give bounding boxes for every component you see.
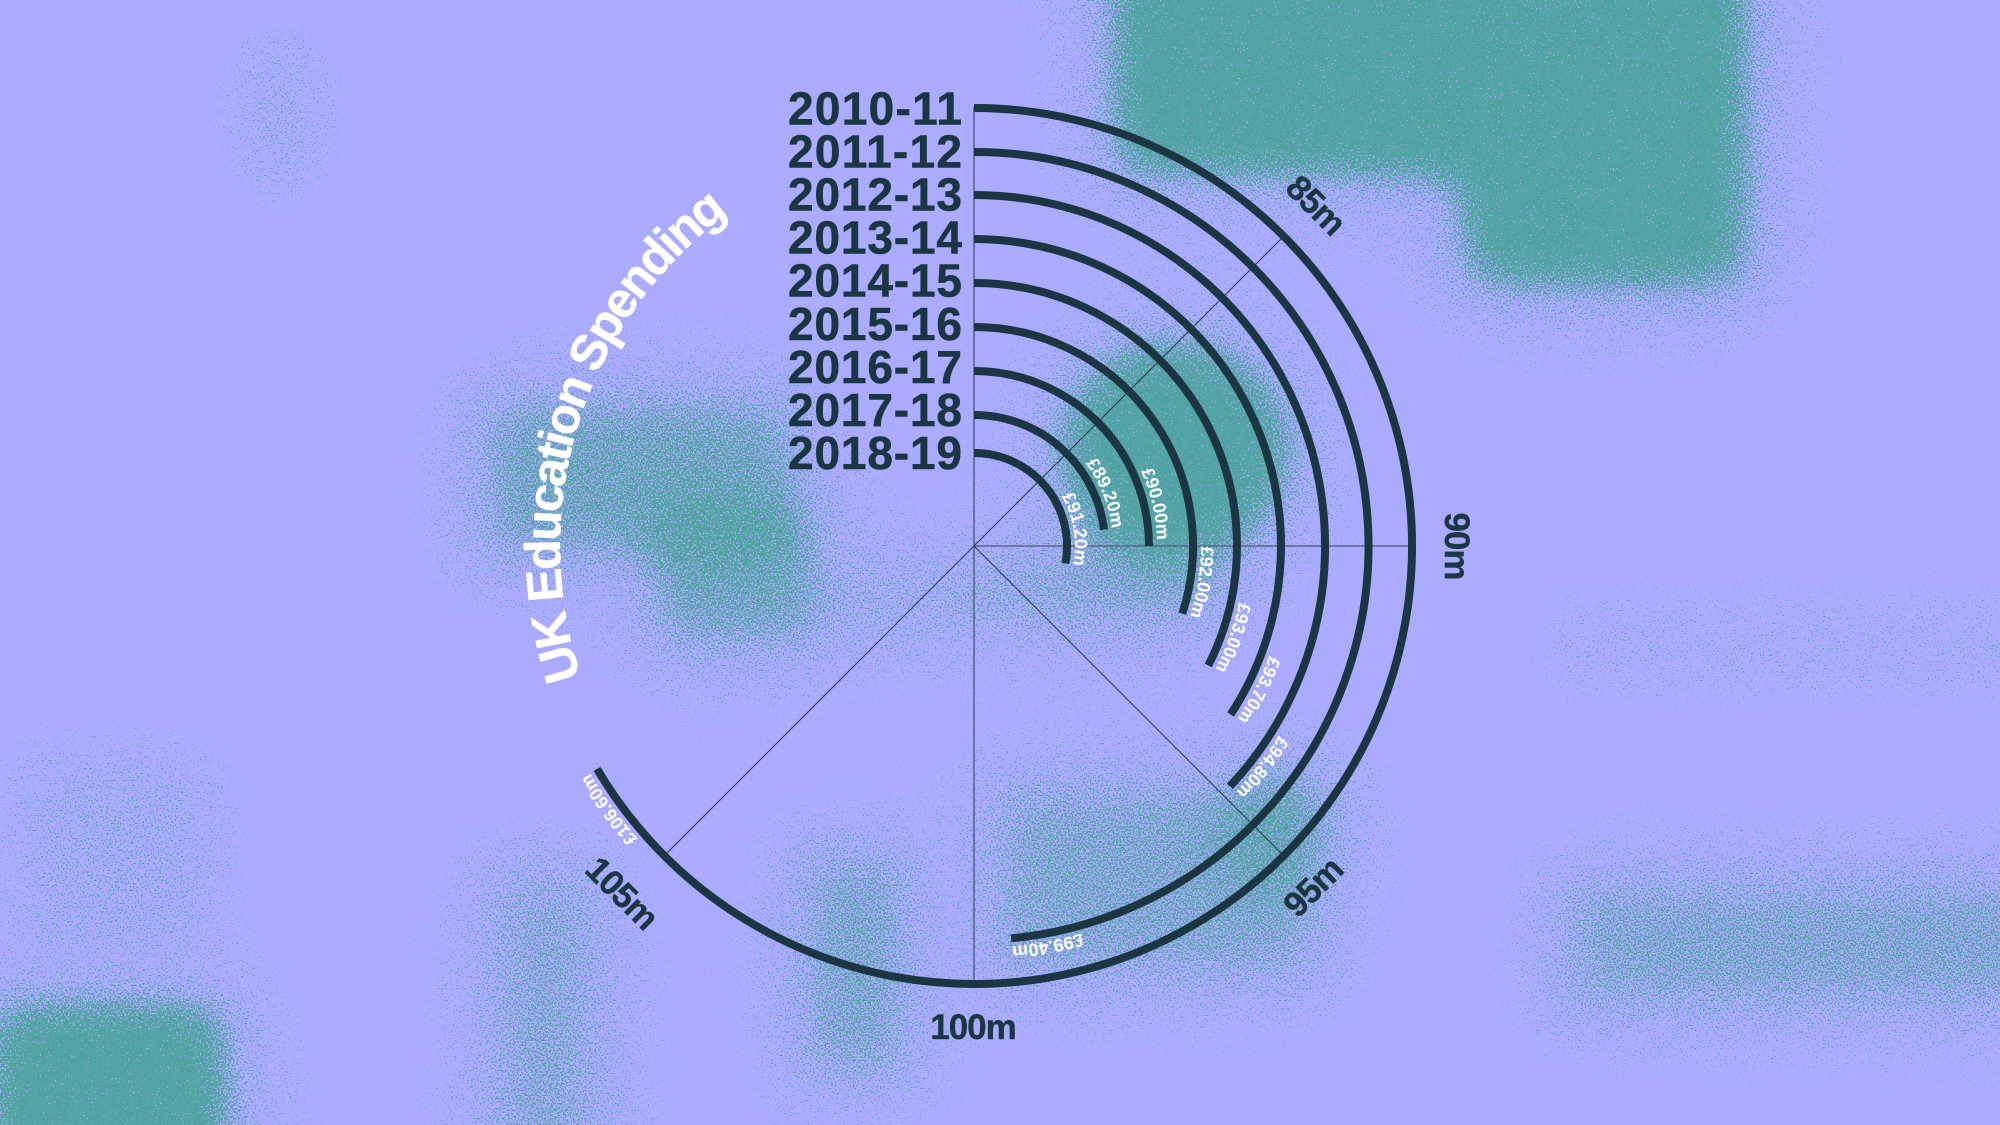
chart: radial bars <box>578 82 1476 1047</box>
axis label: 90m: 90m <box>1437 512 1476 580</box>
arc: 2012-13 <box>974 195 1325 786</box>
value labels: £99.40m <box>1012 933 1084 956</box>
arc: 2017-18 <box>974 415 1104 530</box>
arc: 2011-12 <box>974 152 1369 938</box>
value labels: £93.70m <box>1238 656 1280 722</box>
year labels: 2018-19 <box>788 427 962 479</box>
value labels: £106.60m <box>583 774 638 844</box>
value labels <box>583 458 1288 956</box>
year labels: 2012-13 <box>788 168 962 220</box>
axis label: 105m: 105m <box>578 849 666 937</box>
axis label: 85m: 85m <box>1278 168 1353 243</box>
arc: 2010-11 <box>597 108 1412 984</box>
value labels: £91.20m <box>1062 493 1088 565</box>
arc: 2016-17 <box>974 371 1149 546</box>
value labels: £89.20m <box>1086 458 1121 528</box>
value labels: £93.00m <box>1216 602 1250 672</box>
title: UK Education Spending <box>523 194 728 684</box>
arc: 2013-14 <box>974 239 1281 714</box>
arc: 2014-15 <box>974 283 1237 665</box>
axis spokes <box>664 107 1412 983</box>
year labels: 2010-11 <box>788 82 962 134</box>
background: teal grain blobs <box>30 50 1340 1080</box>
arc: 2015-16 <box>974 327 1193 614</box>
value labels: £90.00m <box>1141 468 1168 539</box>
value labels: £94.80m <box>1236 736 1288 796</box>
axis label: 100m: 100m <box>930 1008 1016 1047</box>
year labels: 2016-17 <box>788 341 962 393</box>
year labels: 2014-15 <box>788 255 962 307</box>
year labels: 2011-12 <box>788 125 962 177</box>
year labels: 2015-16 <box>788 298 962 350</box>
arc: 2018-19 <box>974 453 1067 563</box>
axis label: 95m: 95m <box>1276 850 1351 925</box>
year labels: 2017-18 <box>788 384 962 436</box>
value labels: £92.00m <box>1190 546 1214 618</box>
year labels <box>788 82 962 479</box>
year labels: 2013-14 <box>788 212 962 264</box>
